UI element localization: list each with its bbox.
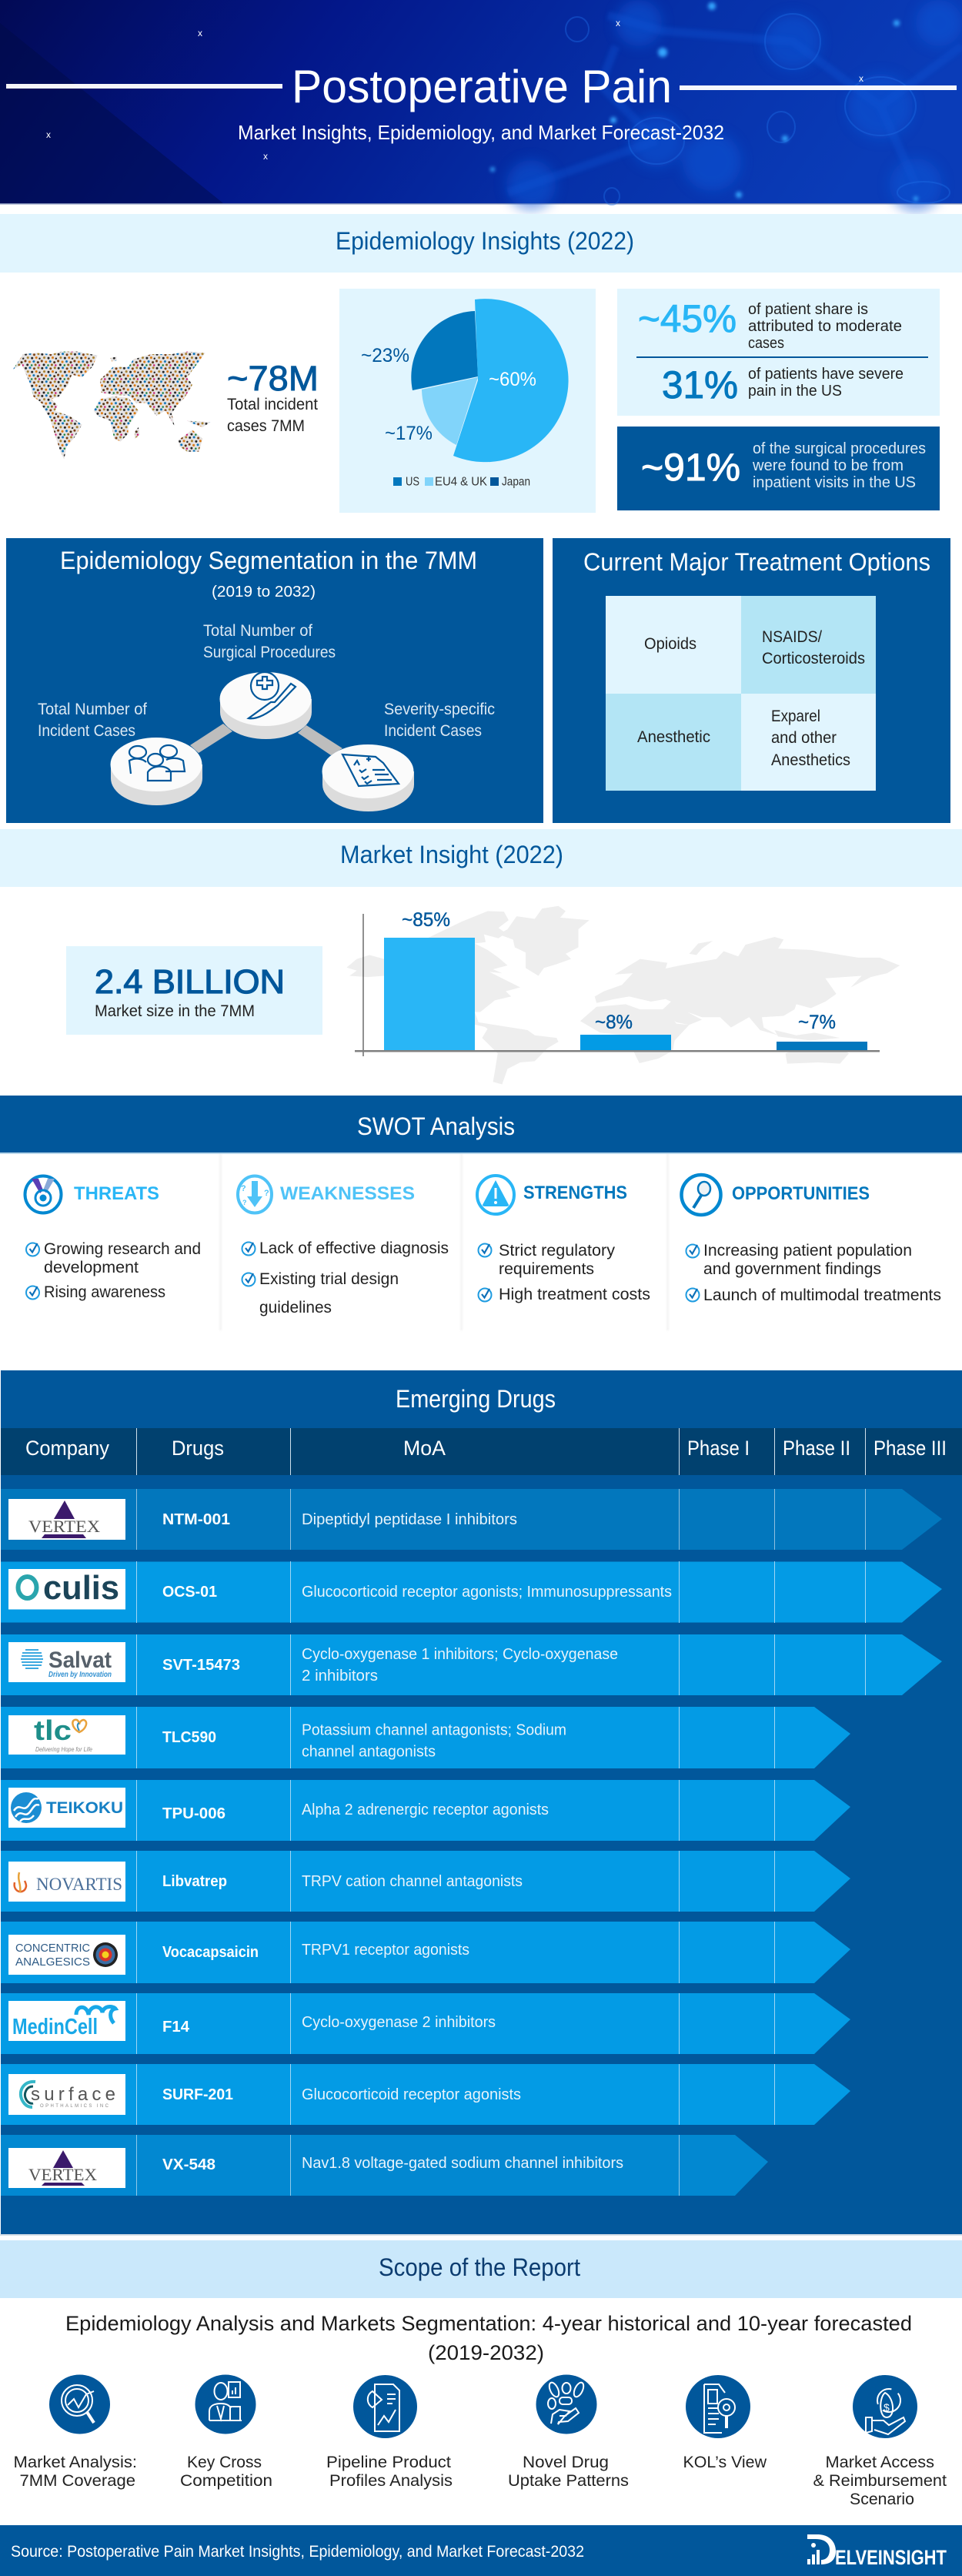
panel: 91 percent surgical procedures: ~91% — [641, 446, 740, 489]
panel: patient share stats — [617, 289, 940, 416]
panel: epidemiology segmentation: Severity-specific — [384, 701, 495, 718]
logo: Salvat: Driven by Innovation — [48, 1671, 112, 1679]
icon: hand with money bag — [853, 2375, 917, 2438]
row: Concentric Vocacapsaicin — [1, 1922, 850, 1983]
row: Surface SURF-201: SURF-201 — [162, 2086, 233, 2103]
scope item: key cross competition: Key Cross — [187, 2454, 262, 2471]
SWOT: threats: Rising awareness — [44, 1283, 165, 1301]
panel: epidemiology segmentation: Total Number of — [38, 701, 147, 718]
icon: document magnifier — [686, 2375, 750, 2438]
panel: patient share stats: attributed to moderate — [748, 318, 902, 335]
SWOT: weaknesses: guidelines — [259, 1299, 332, 1316]
logo: TLC: Delivering Hope for Life — [35, 1746, 92, 1753]
panel: 91 percent surgical procedures: inpatient visits in the US — [753, 474, 916, 491]
pie legend: US — [406, 476, 419, 488]
row: Vertex VX-548 — [1, 2135, 768, 2196]
table header: MoA — [403, 1437, 446, 1460]
row: Salvat SVT-15473: 2 inhibitors — [302, 1668, 378, 1684]
scope item: pipeline product profiles: Pipeline Product — [326, 2454, 451, 2471]
scope item: market access: Scenario — [850, 2491, 914, 2508]
table header: Phase II — [783, 1437, 850, 1460]
scope item: market access: Market Access — [825, 2454, 934, 2471]
treatment grid: Anesthetic — [637, 728, 710, 746]
SWOT: weaknesses: Lack of effective diagnosis — [259, 1239, 449, 1257]
heading band: Scope of the Report — [0, 2240, 962, 2298]
panel: epidemiology segmentation: (2019 to 2032) — [212, 584, 316, 601]
logo: MedinCell: MedinCell — [12, 2015, 98, 2039]
pie legend: Japan — [502, 476, 530, 488]
panel: pie chart: ~60% — [489, 369, 536, 390]
icon: medal — [25, 1176, 62, 1213]
bar chart: market share: ~8% — [595, 1012, 633, 1033]
pie legend: EU4 & UK — [435, 476, 487, 488]
panel: patient share stats: 31% — [662, 363, 738, 406]
scope description — [65, 2312, 912, 2364]
row: MedinCell F14: Cyclo-oxygenase 2 inhibitors — [302, 2014, 496, 2031]
row: Teikoku TPU-006: TPU-006 — [162, 1805, 225, 1822]
icon: magnifier chart — [49, 2374, 110, 2434]
logo: Novartis — [8, 1862, 125, 1902]
callout: market size — [66, 946, 322, 1035]
row: Salvat SVT-15473: Cyclo-oxygenase 1 inhibitors; Cyclo-oxygenase — [302, 1646, 618, 1663]
stat: 78M incident cases — [227, 359, 319, 435]
SWOT column dividers — [220, 1154, 668, 1330]
row: Concentric Vocacapsaicin: Vocacapsaicin — [162, 1944, 259, 1961]
scope item: market access: & Reimbursement — [813, 2472, 947, 2490]
row: MedinCell F14 — [1, 1993, 850, 2054]
heading band: Epidemiology Insights — [0, 214, 962, 273]
table header: Phase III — [873, 1437, 947, 1460]
table header: Phase I — [687, 1437, 750, 1460]
scope item: novel drug uptake patterns: Uptake Patterns — [508, 2472, 629, 2490]
row: Teikoku TPU-006 — [1, 1780, 850, 1841]
SWOT: opportunities — [682, 1175, 941, 1304]
panel: epidemiology segmentation: Epidemiology Segmentation in the 7MM — [60, 547, 477, 574]
row: TLC TLC590: Potassium channel antagonists; Sodium — [302, 1721, 566, 1738]
table header: Drugs — [172, 1437, 224, 1460]
logo: DelveInsight — [807, 2534, 947, 2569]
panel: patient share stats: of patients have severe — [748, 366, 904, 383]
decorative star marks: x — [46, 129, 51, 140]
scope item: pipeline product profiles — [326, 2375, 453, 2490]
panel: patient share stats: cases — [748, 335, 784, 352]
stat: 78M incident cases: Total incident — [227, 396, 318, 413]
panel: epidemiology segmentation — [6, 538, 543, 823]
panel: patient share stats: pain in the US — [748, 383, 842, 400]
logo: Surface: surface — [31, 2084, 115, 2105]
icon: hand with pills — [536, 2374, 597, 2434]
panel: patient share stats: of patient share is — [748, 301, 868, 318]
callout: market size: 2.4 BILLION — [95, 963, 285, 1001]
SWOT: strengths: High treatment costs — [499, 1286, 650, 1303]
row: Oculis OCS-01 — [1, 1561, 942, 1623]
treatment grid: Opioids — [644, 635, 696, 653]
bar chart: market share — [355, 909, 880, 1056]
icon: down arrow: ? — [242, 1199, 246, 1206]
heading band: Scope of the Report: Scope of the Report — [379, 2253, 580, 2281]
treatment grid — [606, 596, 876, 791]
decorative star marks: x — [616, 18, 620, 28]
panel: pie chart: ~23% — [361, 345, 409, 366]
title: Postoperative Pain — [292, 61, 672, 112]
title rule left — [6, 84, 282, 89]
panel: 91 percent surgical procedures: were found to be from — [752, 457, 904, 474]
logo: Vertex: VERTEX — [28, 1517, 100, 1536]
heading band: Epidemiology Insights: Epidemiology Insights (2022) — [336, 227, 634, 255]
SWOT: strengths — [477, 1176, 650, 1303]
logo: Concentric Analgesics: CONCENTRIC — [15, 1942, 90, 1955]
icon: warning triangle — [477, 1176, 514, 1214]
row: Novartis Libvatrep: Libvatrep — [162, 1873, 227, 1890]
panel: emerging drugs: Emerging Drugs — [396, 1385, 556, 1413]
heading band: Market Insight: Market Insight (2022) — [340, 841, 563, 868]
SWOT: opportunities: Launch of multimodal treatments — [703, 1286, 941, 1304]
callout: market size: Market size in the 7MM — [95, 1002, 255, 1020]
panel: 91 percent surgical procedures: of the surgical procedures — [753, 440, 926, 457]
source text: Source: Postoperative Pain Market Insights, Epidemiology, and Market Forecast-2032 — [11, 2543, 584, 2561]
footer — [0, 2525, 962, 2576]
SWOT: strengths: STRENGTHS — [523, 1183, 627, 1203]
logo: TLC — [8, 1715, 125, 1755]
subtitle: Market Insights, Epidemiology, and Market Forecast-2032 — [238, 121, 724, 144]
logo: Oculis — [8, 1569, 125, 1609]
panel: emerging drugs — [0, 1370, 962, 2236]
icon: report document — [353, 2375, 417, 2438]
treatment grid: Corticosteroids — [762, 650, 865, 667]
panel: pie chart: ~17% — [385, 423, 433, 444]
row: TLC TLC590 — [1, 1707, 850, 1768]
scope item: key cross competition — [180, 2374, 272, 2490]
pie chart slices — [411, 299, 569, 462]
scope item: market access — [813, 2375, 947, 2508]
row: Vertex NTM-001: Dipeptidyl peptidase I inhibitors — [302, 1511, 517, 1528]
grey background world map — [346, 906, 900, 1085]
logo: Teikoku: TEIKOKU — [46, 1799, 123, 1817]
SWOT heading band — [0, 1096, 962, 1154]
logo: Salvat: Salvat — [48, 1648, 112, 1673]
icon: down arrow: ? — [241, 1184, 246, 1193]
world map with people dots — [13, 352, 210, 460]
scope item: key cross competition: Competition — [180, 2472, 272, 2490]
disk: severity-specific cases — [322, 744, 414, 811]
disk: incident cases — [111, 738, 202, 805]
logo: Teikoku — [8, 1788, 125, 1828]
logo: Concentric Analgesics — [8, 1935, 125, 1975]
title rule right — [680, 85, 957, 90]
scope item: novel drug uptake patterns — [508, 2374, 629, 2490]
logo: Salvat — [8, 1642, 125, 1682]
bar chart: market share: ~7% — [798, 1012, 836, 1033]
row: Novartis Libvatrep: TRPV cation channel antagonists — [302, 1873, 523, 1890]
panel: epidemiology segmentation: Total Number of — [203, 622, 312, 640]
decorative star marks: x — [263, 151, 268, 162]
heading band: Market Insight — [0, 829, 962, 887]
panel: 91 percent surgical procedures — [617, 427, 940, 510]
row: Vertex NTM-001: NTM-001 — [162, 1511, 230, 1528]
icon: down arrow — [238, 1176, 272, 1213]
logo: Surface: OPHTHALMICS INC — [40, 2104, 109, 2109]
SWOT: threats — [25, 1176, 201, 1301]
logo: MedinCell — [8, 2001, 125, 2041]
scope item: market analysis: Market Analysis: — [14, 2454, 137, 2471]
treatment grid: NSAIDS/ — [762, 628, 822, 646]
scope item: market analysis: 7MM Coverage — [20, 2472, 135, 2490]
panel: epidemiology segmentation: Incident Cases — [38, 722, 135, 740]
scope item: KOL view: KOL’s View — [683, 2454, 767, 2471]
row: TLC TLC590: channel antagonists — [302, 1743, 436, 1760]
logo: Surface — [8, 2074, 125, 2115]
panel: epidemiology segmentation: Surgical Procedures — [203, 644, 336, 661]
table header — [1, 1428, 962, 1475]
row: Oculis OCS-01: OCS-01 — [162, 1584, 217, 1601]
row: Vertex VX-548: Nav1.8 voltage-gated sodium channel inhibitors — [302, 2155, 623, 2172]
connector bars — [190, 724, 342, 755]
stat: 78M incident cases: cases 7MM — [227, 417, 305, 435]
logo: Vertex: VERTEX — [28, 2165, 97, 2184]
scope item: pipeline product profiles: Profiles Analysis — [329, 2472, 453, 2490]
treatment grid: Exparel — [771, 708, 820, 725]
row: Concentric Vocacapsaicin: TRPV1 receptor agonists — [302, 1942, 469, 1959]
panel: current major treatment options — [553, 538, 950, 823]
logo: Oculis: culis — [43, 1569, 119, 1607]
table header: Company — [25, 1437, 109, 1460]
header banner — [0, 0, 962, 211]
logo: Vertex — [8, 1499, 125, 1540]
SWOT: threats: development — [44, 1259, 139, 1276]
row: Salvat SVT-15473 — [1, 1634, 942, 1695]
row: Vertex VX-548: VX-548 — [162, 2156, 215, 2173]
icon: person with charts — [195, 2374, 256, 2434]
scope description: Epidemiology Analysis and Markets Segmentation: 4-year historical and 10-year forecasted — [65, 2312, 912, 2335]
panel: pie chart — [339, 289, 596, 513]
SWOT: strengths: requirements — [499, 1260, 594, 1278]
row: Teikoku TPU-006: Alpha 2 adrenergic receptor agonists — [302, 1802, 549, 1818]
row: Oculis OCS-01: Glucocorticoid receptor agonists; Immunosuppressants — [302, 1584, 672, 1601]
row: Vertex NTM-001 — [1, 1489, 942, 1550]
panel: patient share stats: ~45% — [638, 297, 737, 340]
row: Surface SURF-201 — [1, 2064, 850, 2125]
scope description: (2019-2032) — [428, 2341, 544, 2364]
scope item: novel drug uptake patterns: Novel Drug — [523, 2454, 609, 2471]
logo: Concentric Analgesics: ANALGESICS — [15, 1955, 90, 1969]
SWOT heading band: SWOT Analysis — [357, 1112, 515, 1140]
logo: Novartis: NOVARTIS — [36, 1875, 122, 1894]
pie legend — [393, 476, 530, 488]
SWOT: opportunities: and government findings — [703, 1260, 881, 1278]
SWOT: threats: Growing research and — [44, 1240, 201, 1258]
SWOT: strengths: Strict regulatory — [499, 1242, 616, 1260]
SWOT: weaknesses: WEAKNESSES — [280, 1183, 415, 1204]
panel: current major treatment options: Current Major Treatment Options — [583, 548, 930, 576]
row: Salvat SVT-15473: SVT-15473 — [162, 1657, 240, 1674]
panel: epidemiology segmentation: Incident Cases — [384, 722, 482, 740]
row: TLC TLC590: TLC590 — [162, 1729, 216, 1746]
decorative star marks: x — [198, 28, 202, 38]
decorative star marks: x — [859, 73, 863, 84]
SWOT: weaknesses: Existing trial design — [259, 1270, 399, 1288]
SWOT: threats: THREATS — [74, 1183, 159, 1204]
icon: down arrow: ? — [264, 1189, 269, 1198]
bar chart: market share: ~85% — [402, 909, 450, 931]
scope item: market analysis — [14, 2374, 137, 2490]
stat: 78M incident cases: ~78M — [227, 359, 319, 398]
SWOT: opportunities: Increasing patient population — [703, 1242, 912, 1260]
decorative star marks — [46, 18, 863, 162]
row: MedinCell F14: F14 — [162, 2019, 190, 2036]
row: Surface SURF-201: Glucocorticoid receptor agonists — [302, 2086, 521, 2103]
SWOT: opportunities: OPPORTUNITIES — [732, 1183, 870, 1204]
logo: Vertex — [8, 2148, 125, 2188]
icon: hand with money bag: $ — [884, 2401, 890, 2414]
disk: surgical procedures — [220, 672, 312, 739]
SWOT: weaknesses — [238, 1176, 449, 1316]
row: Novartis Libvatrep — [1, 1851, 850, 1912]
treatment grid: Anesthetics — [771, 751, 850, 769]
icon: magnifier — [682, 1175, 720, 1215]
logo: TLC: tlc — [34, 1715, 72, 1746]
scope item: KOL view — [683, 2375, 767, 2471]
treatment grid: and other — [771, 729, 837, 747]
